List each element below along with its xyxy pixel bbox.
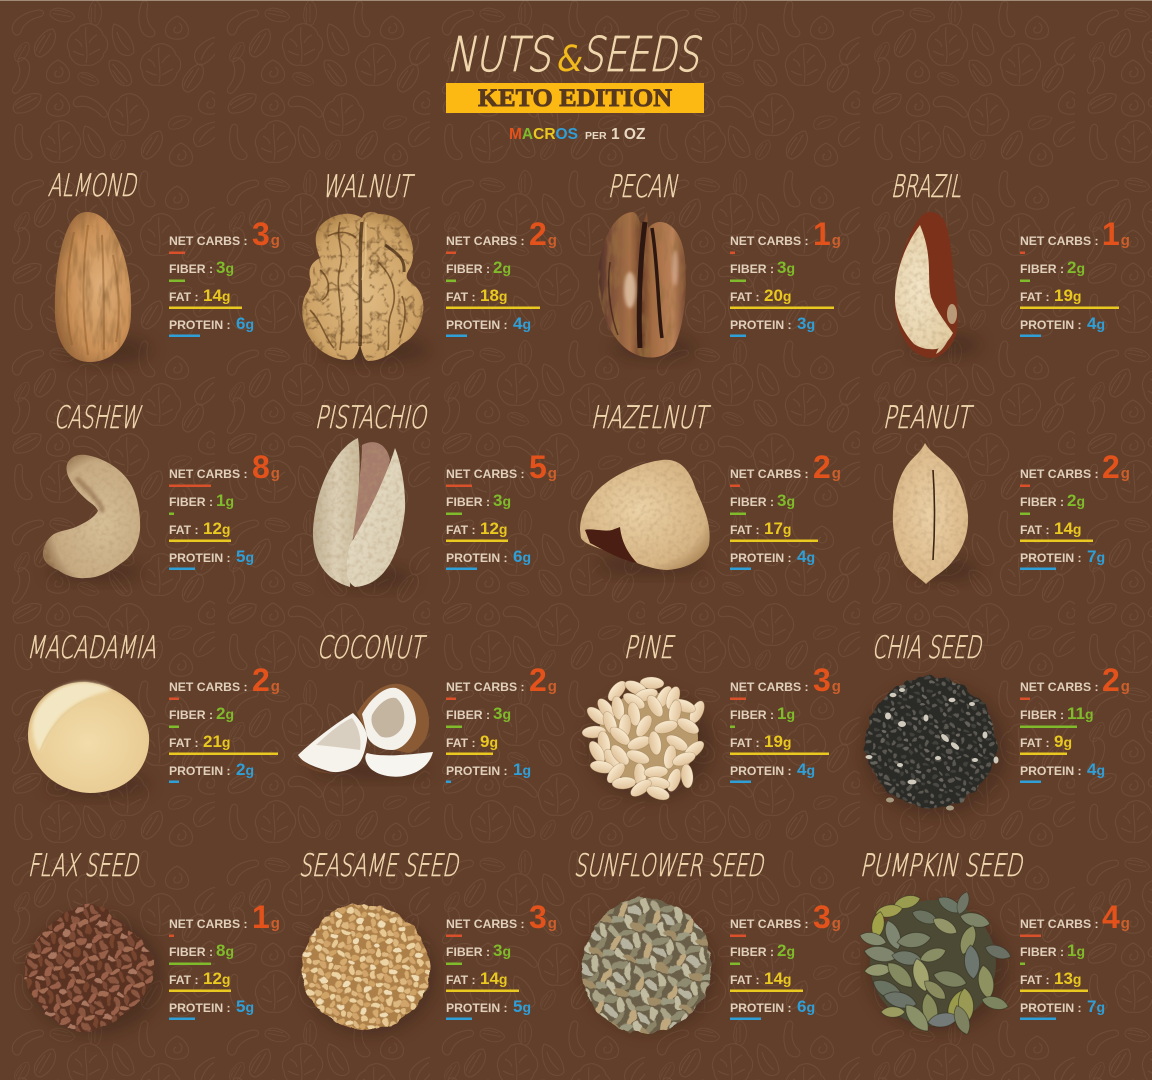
protein: PROTEIN : — [1020, 1001, 1082, 1015]
net carbs: NET CARBS : — [169, 467, 248, 481]
fat: 9g — [1054, 732, 1072, 751]
fiber — [730, 941, 795, 965]
protein — [730, 314, 815, 337]
subtitle: macros per 1 oz: ACROS — [522, 126, 578, 143]
name: CASHEW — [52, 400, 146, 436]
protein: PROTEIN : — [169, 318, 231, 332]
protein: 4g — [797, 547, 815, 566]
protein: 4g — [513, 314, 531, 333]
card: walnut — [302, 169, 557, 364]
fat — [1020, 732, 1072, 755]
stats — [730, 216, 841, 337]
fat: FAT : — [730, 973, 760, 987]
protein — [730, 997, 815, 1020]
fiber: FIBER : — [1020, 945, 1064, 959]
net carbs: 3g — [529, 899, 557, 935]
fiber: 3g — [493, 491, 511, 510]
fiber: FIBER : — [169, 495, 213, 509]
net carbs: NET CARBS : — [169, 680, 248, 694]
fiber: 3g — [216, 258, 234, 277]
protein — [446, 314, 531, 337]
icon: pecan — [598, 212, 697, 360]
net carbs: NET CARBS : — [730, 680, 809, 694]
icon: sunflower seeds — [582, 898, 716, 1033]
fiber — [730, 258, 795, 282]
card: pumpkin seed — [858, 848, 1130, 1037]
fiber — [1020, 258, 1085, 282]
fat: 14g — [764, 969, 791, 988]
banner: keto edition — [446, 83, 704, 113]
icon: pumpkin seeds — [858, 890, 1013, 1037]
net carbs — [730, 216, 841, 254]
stats — [1020, 216, 1130, 337]
fiber: FIBER : — [446, 945, 490, 959]
name: CHIA SEED — [870, 630, 987, 666]
fat: FAT : — [1020, 973, 1050, 987]
fiber: FIBER : — [169, 708, 213, 722]
protein — [730, 760, 815, 783]
fiber — [730, 491, 795, 515]
card: brazil — [889, 169, 1130, 358]
fiber: FIBER : — [446, 708, 490, 722]
fat: 20g — [764, 286, 791, 305]
fiber: 3g — [493, 704, 511, 723]
net carbs: 3g — [813, 662, 841, 698]
card: sesame seed — [297, 848, 557, 1035]
icon: flax seeds — [25, 905, 163, 1035]
protein: PROTEIN : — [446, 318, 508, 332]
net carbs: 5g — [529, 449, 557, 485]
icon: brazil nut — [895, 212, 981, 358]
fat: 19g — [1054, 286, 1081, 305]
protein: PROTEIN : — [169, 551, 231, 565]
fat: 14g — [203, 286, 230, 305]
net carbs — [730, 899, 841, 937]
card: coconut — [298, 630, 557, 783]
name: COCONUT — [315, 630, 429, 666]
fat — [446, 519, 508, 542]
protein: PROTEIN : — [446, 551, 508, 565]
protein — [446, 997, 531, 1020]
fat — [730, 286, 834, 309]
protein: PROTEIN : — [730, 764, 792, 778]
fat: FAT : — [446, 523, 476, 537]
protein: 4g — [1087, 760, 1105, 779]
fiber — [169, 704, 234, 728]
fat: FAT : — [169, 736, 199, 750]
fiber — [446, 258, 511, 282]
icon: almond — [55, 212, 152, 364]
fiber — [1020, 704, 1094, 728]
fiber — [1020, 491, 1085, 515]
fiber — [169, 491, 234, 515]
net carbs: 2g — [1102, 662, 1130, 698]
net carbs — [730, 662, 841, 700]
stats — [169, 216, 280, 337]
net carbs: NET CARBS : — [1020, 917, 1099, 931]
fiber: 11g — [1067, 704, 1094, 723]
net carbs — [730, 449, 841, 487]
net carbs: NET CARBS : — [169, 917, 248, 931]
fat — [446, 286, 540, 309]
fiber: FIBER : — [730, 495, 774, 509]
net carbs: 2g — [529, 662, 557, 698]
net carbs — [1020, 899, 1130, 937]
protein: 7g — [1087, 997, 1105, 1016]
net carbs — [1020, 449, 1130, 487]
protein — [169, 997, 254, 1020]
protein: PROTEIN : — [446, 764, 508, 778]
protein: PROTEIN : — [169, 1001, 231, 1015]
fat: FAT : — [446, 736, 476, 750]
fiber: 1g — [216, 491, 234, 510]
name: PEANUT — [881, 400, 976, 436]
stats — [446, 662, 557, 783]
title: nuts and seeds: & — [553, 37, 588, 80]
fiber — [446, 491, 511, 515]
stats — [446, 216, 557, 337]
stats — [446, 899, 557, 1020]
protein: PROTEIN : — [169, 764, 231, 778]
net carbs — [169, 662, 280, 700]
net carbs: 1g — [813, 216, 841, 252]
protein: 5g — [236, 547, 254, 566]
card: macadamia — [25, 630, 280, 796]
name: WALNUT — [320, 169, 417, 205]
stats — [169, 899, 280, 1020]
icon: macadamia — [28, 682, 150, 796]
fiber: 2g — [1067, 491, 1085, 510]
stats — [730, 662, 841, 783]
protein: 4g — [797, 760, 815, 779]
net carbs: NET CARBS : — [169, 234, 248, 248]
fiber — [446, 941, 511, 965]
fat: 13g — [1054, 969, 1081, 988]
net carbs: 4g — [1102, 899, 1130, 935]
fiber — [169, 258, 234, 282]
net carbs: 1g — [252, 899, 280, 935]
net carbs — [1020, 662, 1130, 700]
fiber: FIBER : — [730, 945, 774, 959]
fiber: FIBER : — [730, 262, 774, 276]
protein — [169, 314, 254, 337]
fat: 18g — [480, 286, 507, 305]
fat: 12g — [203, 519, 230, 538]
stats — [730, 449, 841, 570]
net carbs: NET CARBS : — [730, 917, 809, 931]
protein: 3g — [797, 314, 815, 333]
card: hazelnut — [580, 400, 841, 575]
name: PECAN — [606, 169, 683, 205]
card: flax seed — [25, 848, 280, 1035]
net carbs: 2g — [813, 449, 841, 485]
fat — [1020, 286, 1119, 309]
protein: PROTEIN : — [1020, 551, 1082, 565]
fiber — [446, 704, 511, 728]
card: chia seed — [863, 630, 1130, 816]
protein: PROTEIN : — [446, 1001, 508, 1015]
protein: 6g — [513, 547, 531, 566]
fiber: FIBER : — [730, 708, 774, 722]
fat: 14g — [1054, 519, 1081, 538]
fat: 17g — [764, 519, 791, 538]
fiber: 3g — [493, 941, 511, 960]
name: MACADAMIA — [25, 630, 162, 666]
fat — [169, 286, 242, 309]
fat: FAT : — [446, 973, 476, 987]
net carbs: NET CARBS : — [1020, 680, 1099, 694]
title: nuts and seeds: NUTS — [444, 27, 560, 83]
net carbs: NET CARBS : — [730, 234, 809, 248]
net carbs: 2g — [252, 662, 280, 698]
fat: FAT : — [1020, 290, 1050, 304]
stats — [169, 449, 280, 570]
fiber: 2g — [493, 258, 511, 277]
title: nuts and seeds — [444, 27, 708, 83]
card: almond — [46, 168, 280, 364]
fat: 19g — [764, 732, 791, 751]
protein: 7g — [1087, 547, 1105, 566]
protein — [446, 547, 531, 570]
fat — [730, 519, 818, 542]
card: sunflower seed — [572, 848, 841, 1033]
protein: 4g — [1087, 314, 1105, 333]
net carbs — [169, 899, 280, 937]
net carbs — [169, 216, 280, 254]
card: cashew — [43, 400, 280, 582]
name: HAZELNUT — [589, 400, 713, 436]
fiber — [169, 941, 234, 965]
fat: 12g — [480, 519, 507, 538]
protein — [730, 547, 815, 570]
card: pecan — [598, 169, 841, 360]
subtitle: macros per 1 oz: 1 OZ — [611, 126, 646, 143]
fiber: FIBER : — [169, 262, 213, 276]
fiber — [1020, 941, 1085, 965]
icon: sesame seeds — [302, 904, 436, 1035]
fiber: FIBER : — [1020, 708, 1064, 722]
name: SEASAME SEED — [297, 848, 464, 884]
fiber: FIBER : — [446, 495, 490, 509]
net carbs: NET CARBS : — [446, 467, 525, 481]
icon: pine nuts — [582, 676, 712, 803]
protein: PROTEIN : — [1020, 318, 1082, 332]
protein: 6g — [797, 997, 815, 1016]
icon: cashew — [43, 455, 143, 582]
net carbs — [1020, 216, 1130, 254]
fat: FAT : — [1020, 736, 1050, 750]
fat — [169, 732, 278, 755]
net carbs: NET CARBS : — [446, 680, 525, 694]
net carbs — [446, 449, 557, 487]
fat: FAT : — [169, 290, 199, 304]
fat — [1020, 519, 1093, 542]
fiber: FIBER : — [169, 945, 213, 959]
protein: PROTEIN : — [730, 1001, 792, 1015]
icon: walnut — [302, 212, 430, 364]
fat: FAT : — [169, 973, 199, 987]
fiber: 1g — [777, 704, 795, 723]
net carbs: 1g — [1102, 216, 1130, 252]
name: PISTACHIO — [313, 400, 432, 436]
fat: 9g — [480, 732, 498, 751]
stats — [1020, 662, 1130, 783]
subtitle: macros per 1 oz: M — [509, 126, 522, 143]
fat — [730, 732, 829, 755]
net carbs — [446, 899, 557, 937]
stats — [446, 449, 557, 570]
stats — [730, 899, 841, 1020]
card: pistachio — [313, 400, 557, 589]
name: BRAZIL — [889, 169, 967, 205]
icon: coconut — [298, 684, 433, 779]
net carbs: 2g — [529, 216, 557, 252]
net carbs: NET CARBS : — [446, 917, 525, 931]
protein — [1020, 760, 1105, 783]
icon: peanut — [893, 443, 979, 584]
fat — [1020, 969, 1088, 992]
net carbs: NET CARBS : — [1020, 234, 1099, 248]
fiber: FIBER : — [1020, 262, 1064, 276]
title block — [444, 27, 708, 143]
protein — [169, 547, 254, 570]
protein — [169, 760, 254, 783]
card: peanut — [881, 400, 1130, 584]
fiber: 3g — [777, 258, 795, 277]
stats — [169, 662, 280, 783]
protein: 2g — [236, 760, 254, 779]
fat — [446, 732, 498, 755]
protein: PROTEIN : — [730, 551, 792, 565]
fat: FAT : — [730, 736, 760, 750]
title: nuts and seeds: SEEDS — [578, 27, 708, 83]
net carbs: 3g — [813, 899, 841, 935]
protein — [446, 760, 531, 783]
fat: FAT : — [730, 523, 760, 537]
fiber: 3g — [777, 491, 795, 510]
fat: 12g — [203, 969, 230, 988]
protein: 1g — [513, 760, 531, 779]
subtitle: macros per 1 oz: PER — [585, 130, 607, 142]
stats — [1020, 449, 1130, 570]
banner: keto edition: KETO EDITION — [478, 85, 672, 112]
name: ALMOND — [46, 168, 142, 204]
fiber — [730, 704, 795, 728]
stats — [1020, 899, 1130, 1020]
fiber: 1g — [1067, 941, 1085, 960]
net carbs: 3g — [252, 216, 280, 252]
fat — [446, 969, 519, 992]
fat: FAT : — [1020, 523, 1050, 537]
name: FLAX SEED — [26, 848, 144, 884]
net carbs: NET CARBS : — [1020, 467, 1099, 481]
fiber: FIBER : — [1020, 495, 1064, 509]
net carbs: NET CARBS : — [446, 234, 525, 248]
name: PUMPKIN SEED — [858, 848, 1028, 884]
fiber: FIBER : — [446, 262, 490, 276]
fat — [169, 969, 231, 992]
name: PINE — [622, 630, 679, 666]
net carbs — [446, 216, 557, 254]
fat — [169, 519, 231, 542]
name: SUNFLOWER SEED — [572, 848, 769, 884]
protein — [1020, 547, 1105, 570]
net carbs: NET CARBS : — [730, 467, 809, 481]
fat: 21g — [203, 732, 230, 751]
protein: PROTEIN : — [730, 318, 792, 332]
net carbs — [446, 662, 557, 700]
fat — [730, 969, 803, 992]
fat: FAT : — [446, 290, 476, 304]
fat: 14g — [480, 969, 507, 988]
protein: 5g — [513, 997, 531, 1016]
protein — [1020, 314, 1105, 337]
icon: hazelnut — [580, 460, 710, 575]
fiber: 2g — [1067, 258, 1085, 277]
icon: pistachio — [313, 438, 414, 589]
card: pine — [582, 630, 841, 803]
protein: PROTEIN : — [1020, 764, 1082, 778]
net carbs — [169, 449, 280, 487]
fiber: 8g — [216, 941, 234, 960]
fat: FAT : — [169, 523, 199, 537]
net carbs: 8g — [252, 449, 280, 485]
protein: 5g — [236, 997, 254, 1016]
protein: 6g — [236, 314, 254, 333]
fat: FAT : — [730, 290, 760, 304]
fiber: 2g — [777, 941, 795, 960]
fiber: 2g — [216, 704, 234, 723]
icon: chia seeds — [863, 676, 1007, 816]
net carbs: 2g — [1102, 449, 1130, 485]
protein — [1020, 997, 1105, 1020]
